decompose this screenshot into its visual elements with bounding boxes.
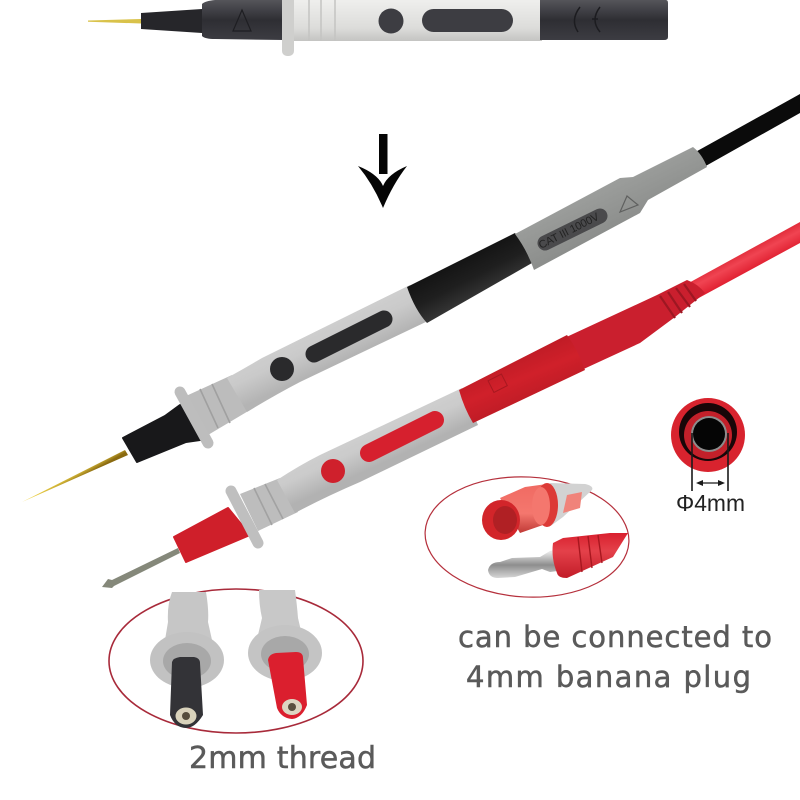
black tip collar [123, 405, 200, 462]
banana plug [488, 533, 628, 578]
dimension label: Φ4mm [676, 490, 745, 516]
caption: banana plug: 4mm banana plug [466, 660, 751, 694]
black cable [690, 94, 800, 172]
grey handle [227, 285, 430, 412]
black probe front view [150, 592, 224, 728]
warning triangle [620, 196, 638, 212]
caption: banana plug: can be connected to [458, 620, 772, 654]
socket rings [671, 398, 745, 472]
red sleeve [459, 335, 585, 423]
grey ribbed grip [186, 375, 250, 435]
socket with grey handle [482, 483, 592, 540]
gold needle [22, 450, 128, 502]
steel needle [102, 548, 180, 588]
grey ribbed grip [240, 478, 298, 531]
black probe: angled [22, 94, 800, 502]
grey handle [277, 388, 478, 513]
black pill [314, 319, 384, 354]
callout: banana plug ellipse [422, 472, 632, 602]
caption: banana plug [458, 620, 772, 694]
CAT III label pill: CAT III 1000V [537, 211, 602, 252]
red probe: angled [102, 222, 800, 588]
dimension lines [692, 433, 728, 491]
red strain relief boot [560, 280, 705, 373]
grey strain relief boot [515, 147, 707, 270]
red cable [685, 222, 800, 300]
red pill [369, 420, 435, 453]
arrow: down [358, 134, 407, 208]
red dot [321, 459, 345, 483]
callout: 2mm thread ellipse [109, 589, 363, 733]
callout: 4mm socket end view [671, 398, 745, 516]
boot ribs [660, 284, 696, 318]
grey flange [180, 392, 208, 443]
top probe: straight view [88, 0, 668, 56]
grey flange [231, 491, 258, 543]
red tip collar [174, 508, 250, 562]
black sleeve [407, 233, 532, 323]
caption: 2mm thread: 2mm thread [189, 741, 376, 776]
red probe front view [248, 590, 322, 719]
black dot [270, 357, 294, 381]
